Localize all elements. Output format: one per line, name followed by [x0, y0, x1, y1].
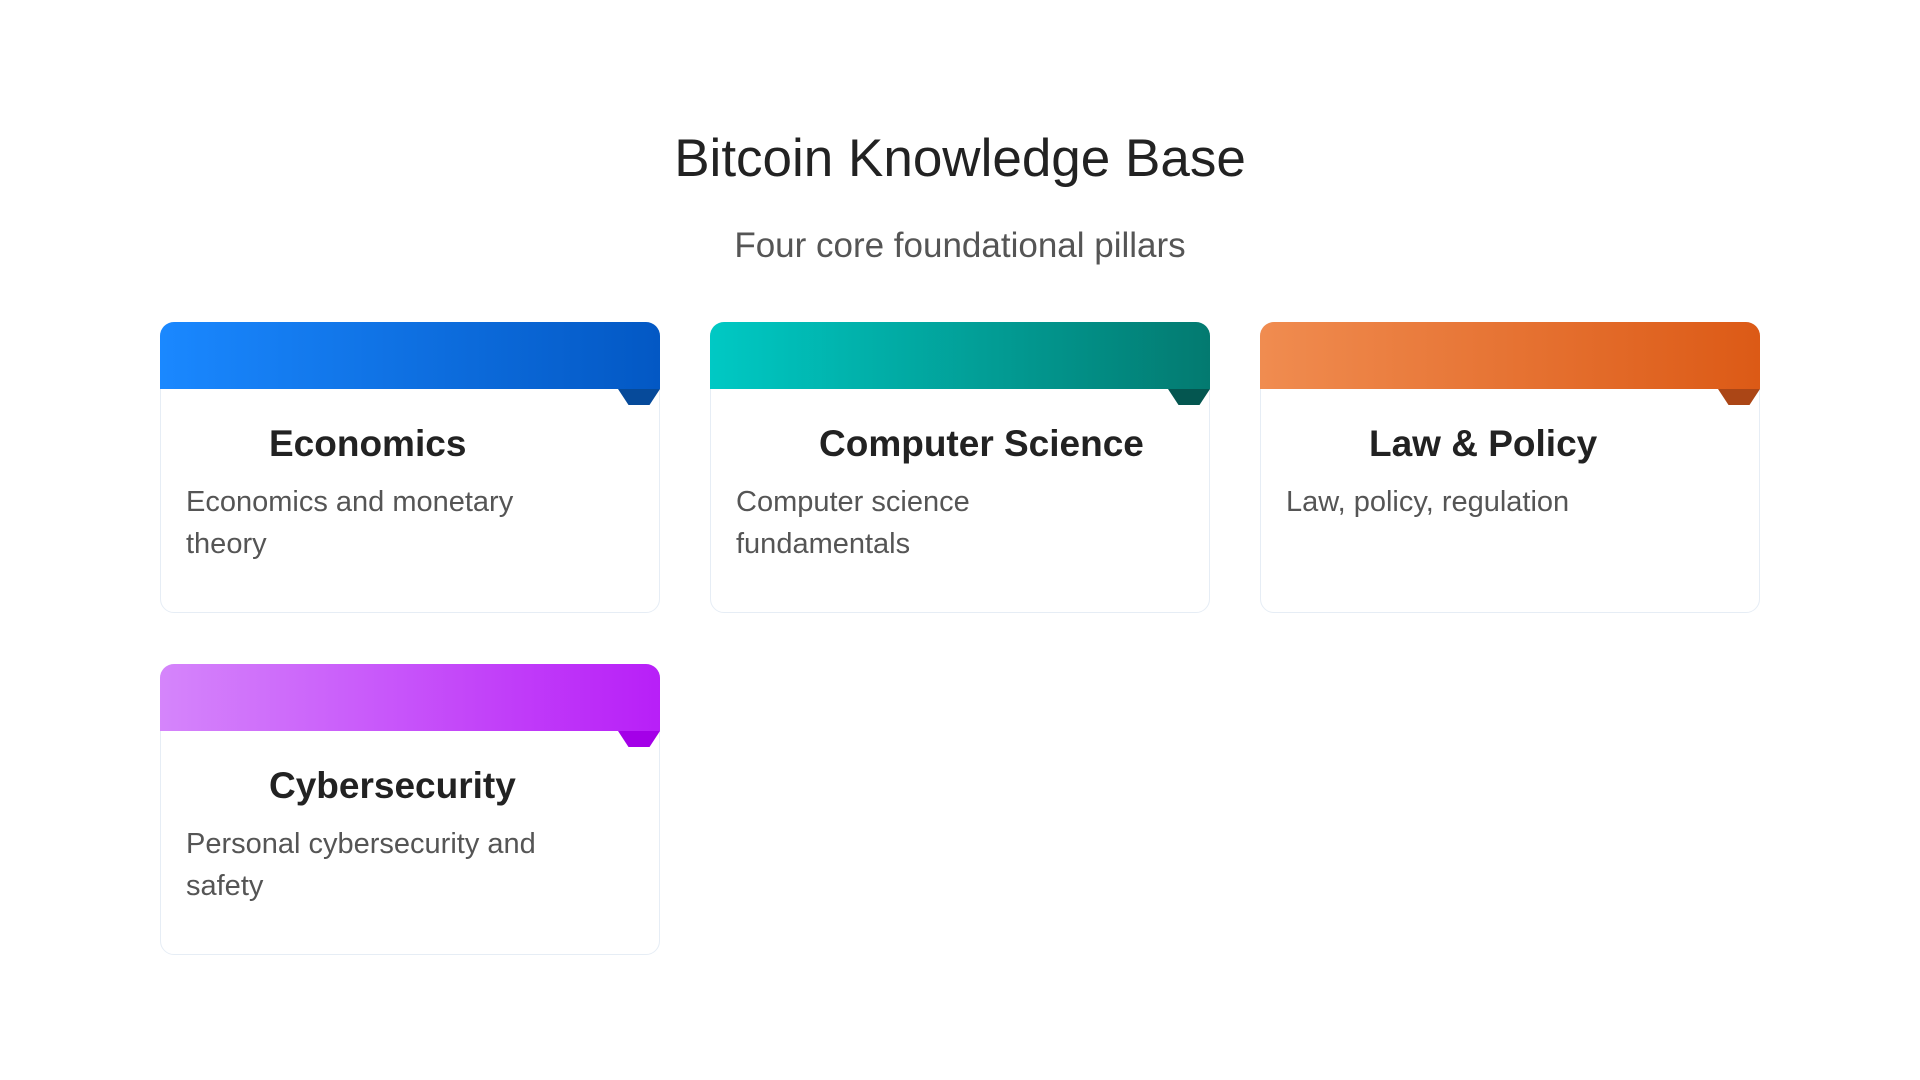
- panel: law & policy: [1260, 322, 1760, 613]
- card title: Economics: [269, 423, 466, 464]
- card description: Computer science fundamentals: [736, 486, 970, 560]
- ribbon fold: [618, 389, 660, 405]
- title: Bitcoin Knowledge Base: [674, 129, 1246, 188]
- panel: economics: [160, 322, 660, 613]
- header band: [160, 664, 660, 731]
- card description: Personal cybersecurity and safety: [186, 828, 536, 902]
- card description: Law, policy, regulation: [1286, 486, 1569, 518]
- card title: Computer Science: [819, 423, 1144, 464]
- panel: computer science: [710, 322, 1210, 613]
- subtitle: Four core foundational pillars: [734, 226, 1186, 265]
- ribbon fold: [1168, 389, 1210, 405]
- panel: cybersecurity: [160, 664, 660, 955]
- header band: [710, 322, 1210, 389]
- header band: [160, 322, 660, 389]
- card title: Law & Policy: [1369, 423, 1597, 464]
- card title: Cybersecurity: [269, 765, 516, 806]
- card description: Economics and monetary theory: [186, 486, 513, 560]
- header band: [1260, 322, 1760, 389]
- ribbon fold: [618, 731, 660, 747]
- ribbon fold: [1718, 389, 1760, 405]
